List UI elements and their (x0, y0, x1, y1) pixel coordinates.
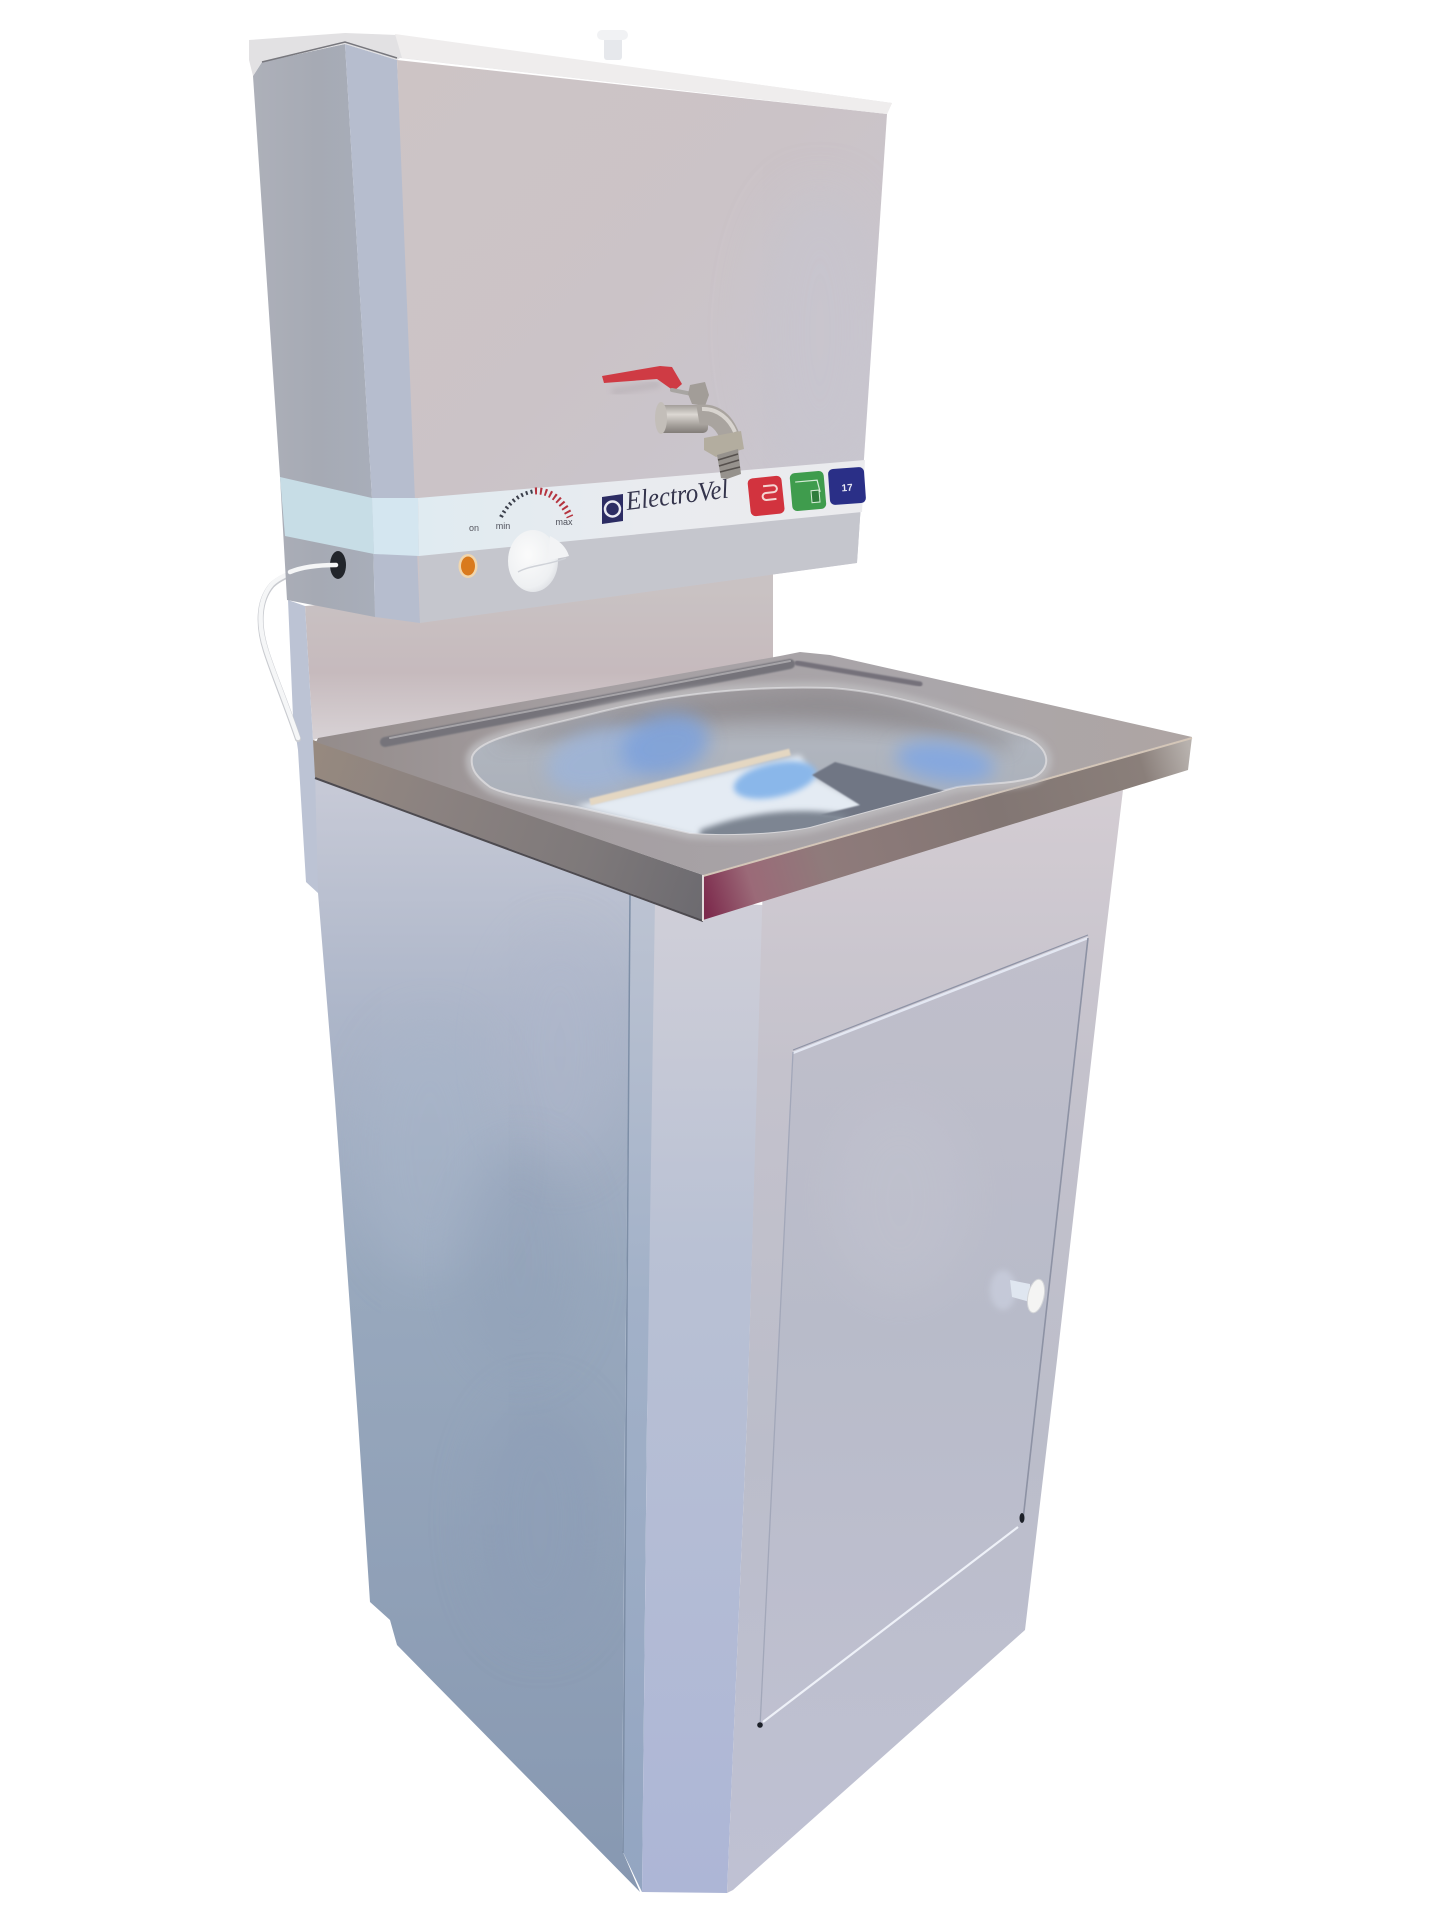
volume badge (828, 467, 866, 505)
temperature gauge: max (555, 517, 573, 527)
red lever handle (602, 366, 682, 391)
tank lid (249, 33, 892, 114)
water tap (602, 366, 744, 479)
label band corner (372, 498, 419, 556)
tap flange (655, 402, 667, 434)
backsplash panel (305, 570, 773, 740)
temperature gauge (496, 491, 573, 531)
stainless steel sink (313, 652, 1192, 921)
hose barb (717, 449, 741, 479)
lever link (672, 390, 692, 394)
brand logo (602, 494, 623, 524)
temperature gauge: min (496, 521, 510, 531)
drain slots (385, 661, 920, 742)
tap coupling nut (704, 431, 744, 457)
tank left side (253, 44, 375, 617)
tank front panel (397, 60, 887, 623)
sink front left lip (313, 740, 703, 920)
door handle (990, 1270, 1047, 1314)
capacity badge (789, 471, 827, 511)
product illustration: sink unit with water tank (249, 30, 1192, 1893)
sink top surface (316, 652, 1192, 875)
indicator lamp (458, 554, 478, 578)
tap valve head (688, 382, 709, 406)
tap neck (698, 415, 731, 440)
water tank (249, 30, 892, 623)
power indicator label: on (469, 523, 479, 533)
sink front right lip (703, 737, 1192, 920)
cabinet door (757, 935, 1088, 1728)
cabinet left side (315, 770, 640, 1892)
tap shadow (612, 384, 660, 392)
cabinet chamfered corner (642, 900, 763, 1893)
control knob (508, 530, 569, 592)
power cord (261, 565, 336, 739)
rear support bracket (288, 600, 318, 893)
cord end (290, 565, 336, 572)
bowl rim bevel (472, 688, 1046, 834)
volume badge: 17 (841, 483, 854, 494)
cabinet right side (727, 790, 1123, 1893)
label band front (418, 460, 865, 556)
tank corner strip (345, 44, 420, 623)
brand name: ElectroVel (623, 474, 730, 516)
sink bowl (472, 688, 1046, 840)
label band side (280, 477, 374, 554)
filler cap (597, 30, 628, 60)
cabinet (315, 770, 1123, 1893)
cabinet seam strip (622, 895, 660, 1892)
power inlet grommet (330, 551, 346, 579)
tap body (658, 405, 708, 433)
heating badge (747, 475, 785, 517)
